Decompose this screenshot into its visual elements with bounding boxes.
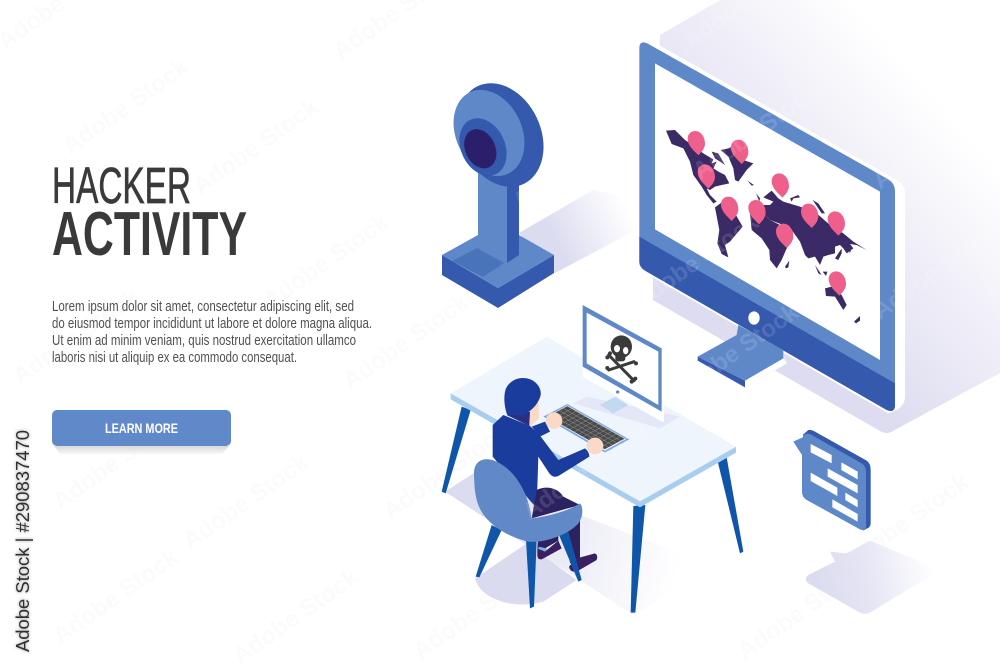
stock id label: Adobe Stock | #290837470	[12, 430, 33, 652]
front lower leg	[567, 520, 580, 563]
artwork watermark: Adobe Stock	[508, 108, 644, 215]
monitor button	[748, 311, 760, 325]
desk right leg	[717, 457, 743, 553]
camera shadow	[519, 190, 640, 273]
background watermark: Adobe Stock	[228, 563, 364, 667]
map pins	[688, 131, 846, 296]
desk top	[451, 337, 736, 507]
torso	[493, 415, 589, 508]
icon: webcam	[440, 69, 560, 308]
body text: Ut enim ad minim veniam, quis nostrud exercitation ullamco	[52, 333, 356, 349]
keyboard	[543, 404, 629, 453]
background watermark: Adobe Stock	[408, 558, 544, 665]
artwork watermark: Adobe Stock	[868, 88, 1000, 195]
background watermark: Adobe Stock	[378, 418, 514, 525]
monitor stand	[698, 325, 787, 387]
small monitor stand	[600, 397, 628, 413]
desk scene	[442, 303, 743, 615]
background watermark: Adobe Stock	[8, 283, 144, 390]
body text: Lorem ipsum dolor sit amet, consectetur adipiscing elit, sed	[52, 299, 354, 315]
artwork watermark: Adobe Stock	[868, 218, 1000, 325]
background watermark: Adobe Stock	[48, 408, 184, 515]
sock	[538, 547, 547, 552]
small monitor shadow	[573, 397, 680, 428]
learn more button	[52, 410, 231, 454]
body text: do eiusmod tempor incididunt ut labore et dolore magna aliqua.	[52, 316, 372, 332]
title	[52, 157, 247, 269]
thigh	[532, 488, 580, 518]
desk back leg	[442, 407, 471, 493]
back lower leg	[537, 533, 558, 548]
large monitor	[639, 40, 905, 413]
background watermark: Adobe Stock	[178, 448, 314, 555]
background watermark: Adobe Stock	[338, 288, 474, 395]
shoes	[537, 541, 597, 572]
icon: skull and crossbones	[605, 335, 638, 384]
body text	[52, 299, 372, 366]
background watermark: Adobe Stock	[48, 543, 184, 650]
chair	[474, 459, 582, 608]
background watermark: Adobe Stock	[258, 208, 394, 315]
front hand	[587, 438, 603, 454]
background watermark: Adobe Stock	[188, 93, 324, 200]
artwork watermark: Adobe Stock	[518, 418, 654, 525]
artwork watermark: Adobe Stock	[628, 208, 764, 315]
person	[493, 378, 603, 572]
monitor shadow	[653, 0, 1000, 433]
icon: chat bubble	[793, 430, 871, 531]
artwork watermark	[508, 0, 1000, 525]
chat bubble shadow	[806, 541, 940, 614]
body text: laboris nisi ut aliquip ex ea commodo consequat.	[52, 350, 297, 366]
floor shadow	[445, 473, 713, 615]
title: HACKER	[52, 157, 191, 214]
background watermark: Adobe Stock	[838, 468, 974, 575]
back hand	[546, 412, 562, 429]
back arm	[532, 422, 550, 437]
neck	[507, 412, 530, 426]
face	[530, 400, 539, 427]
background watermark: Adobe Stock	[733, 558, 869, 665]
small monitor	[583, 303, 664, 422]
artwork watermark: Adobe Stock	[688, 78, 824, 185]
monitor screen	[655, 63, 880, 360]
chair shadow	[475, 543, 577, 605]
world map	[666, 130, 867, 323]
desk front leg	[631, 505, 645, 613]
artwork watermark: Adobe Stock	[668, 298, 804, 405]
stock id label: Adobe Stock | #290837470	[12, 430, 33, 652]
learn more button: LEARN MORE	[105, 420, 178, 436]
background watermark: Adobe Stock	[58, 53, 194, 160]
hood	[504, 378, 541, 415]
title: ACTIVITY	[52, 200, 247, 269]
